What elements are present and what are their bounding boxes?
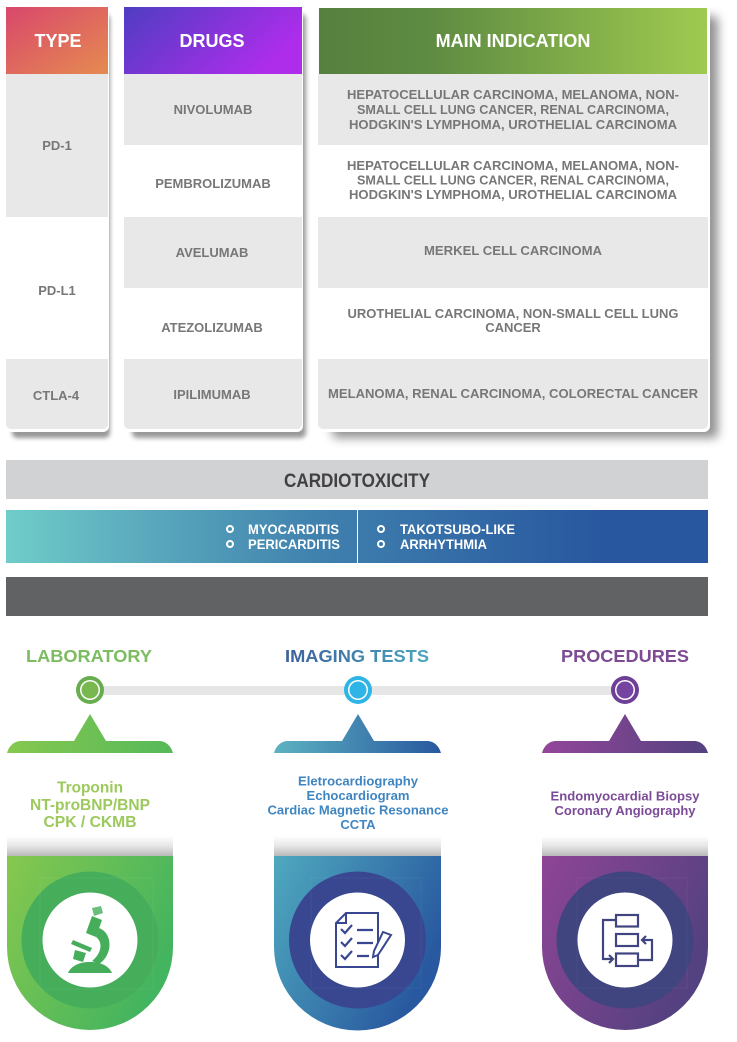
ipilimumab indication (318, 359, 708, 429)
text: imaging tests (268, 774, 448, 832)
text: imaging tests: Cardiac Magnetic Resonance (268, 802, 448, 818)
avelumab indication: MERKEL CELL CARCINOMA (424, 243, 603, 258)
main indication header (319, 8, 707, 74)
text: procedures (550, 788, 700, 818)
pointer: imaging (274, 714, 441, 753)
pembrolizumab row (124, 145, 302, 217)
right bullets: TAKOTSUBO-LIKE (400, 522, 515, 537)
panel: drugs column (123, 6, 306, 438)
nivolumab row: NIVOLUMAB (174, 102, 252, 117)
avelumab indication (318, 217, 708, 288)
atezolizumab indication: UROTHELIAL CARCINOMA, NON-SMALL CELL LUNG (348, 306, 678, 321)
avelumab row (124, 217, 302, 288)
cardiotoxicity list band (6, 510, 708, 563)
type header: TYPE (34, 31, 82, 51)
drugs header: DRUGS (179, 31, 245, 51)
ipilimumab row: IPILIMUMAB (173, 387, 251, 402)
nivolumab row (124, 74, 302, 145)
atezolizumab indication: CANCER (485, 320, 541, 335)
node: imaging (344, 676, 372, 704)
badge: procedures (542, 836, 708, 1030)
panel: type column (5, 6, 110, 438)
heading: procedures: PROCEDURES (561, 646, 689, 666)
PD-L1 row (6, 217, 108, 359)
text: laboratory tests: Troponin (57, 780, 123, 796)
ipilimumab row (124, 359, 302, 429)
pembrolizumab row: PEMBROLIZUMAB (155, 176, 271, 191)
PD-1 row (6, 74, 108, 217)
cardiotoxicity heading bar (6, 460, 708, 499)
heading: laboratory: LABORATORY (26, 646, 152, 666)
left bullets: PERICARDITIS (248, 537, 340, 552)
text: procedures: Coronary Angiography (554, 803, 696, 818)
nivolumab indication: HODGKIN'S LYMPHOMA, UROTHELIAL CARCINOMA (349, 117, 678, 132)
pembrolizumab indication: HODGKIN'S LYMPHOMA, UROTHELIAL CARCINOMA (349, 187, 678, 202)
atezolizumab indication (318, 288, 708, 359)
text: imaging tests: CCTA (340, 817, 376, 832)
right bullets: ARRHYTHMIA (400, 537, 487, 552)
timeline (76, 676, 639, 704)
pointer: laboratory (7, 714, 173, 753)
main indication header: MAIN INDICATION (436, 31, 590, 51)
pembrolizumab indication (318, 145, 708, 217)
pointer: procedures (542, 714, 708, 753)
type header (6, 7, 108, 74)
CTLA-4 row (6, 359, 108, 429)
drugs header (124, 7, 302, 74)
text: laboratory tests (30, 780, 150, 831)
text: laboratory tests: CPK / CKMB (44, 814, 136, 831)
right bullets (378, 522, 515, 552)
icon: checklist (336, 913, 391, 967)
cardiotoxicity heading bar: CARDIOTOXICITY (284, 470, 430, 492)
left bullets (227, 522, 340, 552)
text: imaging tests: Echocardiogram (306, 788, 410, 803)
nivolumab indication: SMALL CELL LUNG CANCER, RENAL CARCINOMA, (357, 102, 669, 117)
heading: imaging tests: IMAGING TESTS (285, 646, 429, 666)
badge: imaging (274, 836, 441, 1031)
ipilimumab indication: MELANOMA, RENAL CARCINOMA, COLORECTAL CANCER (328, 386, 699, 401)
pembrolizumab indication: HEPATOCELLULAR CARCINOMA, MELANOMA, NON- (347, 158, 679, 173)
icon: flowchart (603, 915, 652, 966)
atezolizumab row: ATEZOLIZUMAB (161, 320, 263, 335)
pembrolizumab indication: SMALL CELL LUNG CANCER, RENAL CARCINOMA, (357, 172, 669, 188)
badge: laboratory (7, 836, 173, 1030)
node: laboratory (76, 676, 104, 704)
dark empty band (6, 577, 708, 616)
PD-L1 row: PD-L1 (38, 283, 76, 298)
nivolumab indication (318, 74, 708, 145)
atezolizumab row (124, 288, 302, 359)
text: imaging tests: Eletrocardiography (298, 774, 419, 788)
icon: microscope (68, 906, 112, 973)
panel: main indication column (317, 6, 718, 438)
PD-1 row: PD-1 (42, 138, 72, 153)
left bullets: MYOCARDITIS (248, 522, 339, 537)
avelumab row: AVELUMAB (176, 245, 248, 260)
text: laboratory tests: NT-proBNP/BNP (30, 797, 150, 814)
nivolumab indication: HEPATOCELLULAR CARCINOMA, MELANOMA, NON- (347, 87, 679, 102)
node: procedures (611, 676, 639, 704)
text: procedures: Endomyocardial Biopsy (550, 788, 700, 804)
CTLA-4 row: CTLA-4 (33, 388, 80, 403)
